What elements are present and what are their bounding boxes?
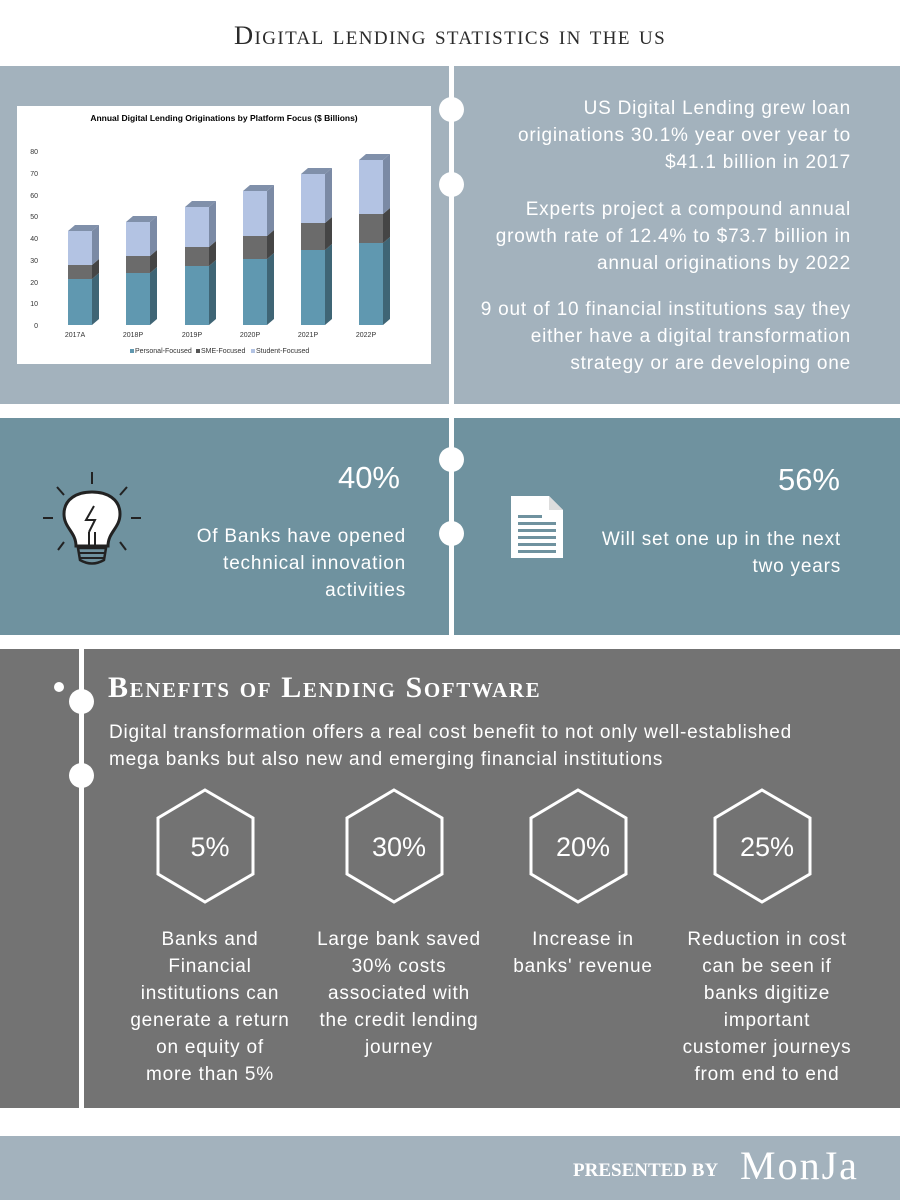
panel: benefits: customer journeys [683,1037,851,1058]
benefit texts: institutions can [141,983,279,1004]
benefit texts: more than 5% [146,1064,274,1085]
panel: growth stats: strategy or are developing one [570,353,851,374]
panel: growth stats: growth rate of 12.4% to $73.7 billion in [496,226,851,247]
panel: growth stats: Experts project a compound annual [526,199,851,220]
bar chart [17,106,431,364]
intro text [109,722,792,770]
hexagons [156,788,812,904]
bar chart: 60 [30,193,38,200]
hexagons: 5% [190,832,230,862]
panel: benefits: the credit lending [319,1010,479,1031]
panel: benefits: journey [365,1037,433,1058]
panel: benefits: can be seen if [702,956,832,977]
panel: benefits: banks' revenue [513,956,653,977]
panel: benefits: Reduction in cost [687,929,847,950]
panel: bank innovation: Will set one up in the next [602,529,841,550]
panel: benefits: Increase in [532,929,634,950]
benefit texts: generate a return [130,1010,290,1031]
stat: 40%: 40% [338,460,400,495]
benefit texts: on equity of [156,1037,264,1058]
heading: Benefits of Lending Software [108,671,541,704]
panel: benefits [0,649,900,1108]
bar chart: 2021P [298,332,318,339]
panel: benefits: banks digitize [704,983,830,1004]
panel: growth stats [0,66,900,404]
icon: document [511,496,563,558]
panel: benefits: from end to end [694,1064,840,1085]
bar chart: 70 [30,171,38,178]
panel: bank innovation: two years [752,556,841,577]
benefit texts: Banks and [162,929,258,950]
benefit texts [130,929,290,1085]
bar chart: 2017A [65,332,85,339]
intro text: Digital transformation offers a real cost benefit to not only well-established [109,722,792,743]
bar chart: 2020P [240,332,260,339]
stat texts: $41.1 billion in 2017 [665,152,851,173]
footer: PRESENTED BY [573,1160,718,1181]
title: Digital lending statistics in the us [234,20,666,50]
footer [0,1136,900,1200]
panel: bank innovation: technical innovation [223,553,406,574]
stat texts [518,98,851,173]
stat texts: US Digital Lending grew loan [584,98,851,119]
panel: benefits: important [724,1010,810,1031]
bar chart: 40 [30,236,38,243]
bar chart: 2022P [356,332,376,339]
bar chart: 2019P [182,332,202,339]
panel: benefits: Large bank saved [317,929,481,950]
hexagons: 20% [556,832,610,862]
panel: bank innovation [0,418,900,635]
bar chart: 80 [30,149,38,156]
stat: 56%: 56% [778,462,840,497]
timeline line top [439,66,464,635]
bar chart: Annual Digital Lending Originations by Platform Focus ($ Billions) [90,113,358,123]
bar chart: 20 [30,280,38,287]
stat texts: originations 30.1% year over year to [518,125,851,146]
panel: growth stats: either have a digital transformation [531,326,851,347]
bar chart: Personal-Focused [135,348,192,355]
bar chart: SME-Focused [201,348,245,355]
bar chart: 30 [30,258,38,265]
bar chart: 0 [34,323,38,330]
panel: bank innovation: Of Banks have opened [197,526,406,547]
panel: growth stats: 9 out of 10 financial institutions say they [481,299,851,320]
bar chart: 10 [30,301,38,308]
panel: bank innovation: activities [325,580,406,601]
panel: benefits: 30% costs [352,956,446,977]
intro text: mega banks but also new and emerging financial institutions [109,749,663,770]
bar chart: 2018P [123,332,143,339]
hexagons: 25% [740,832,794,862]
bar chart: Student-Focused [256,348,309,355]
bar chart: 50 [30,214,38,221]
panel: benefits: associated with [328,983,470,1004]
icon: light bulb [43,472,141,565]
benefit texts: Financial [168,956,252,977]
hexagons: 30% [372,832,426,862]
panel: growth stats: annual originations by 2022 [597,253,851,274]
footer: MonJa [740,1143,859,1188]
